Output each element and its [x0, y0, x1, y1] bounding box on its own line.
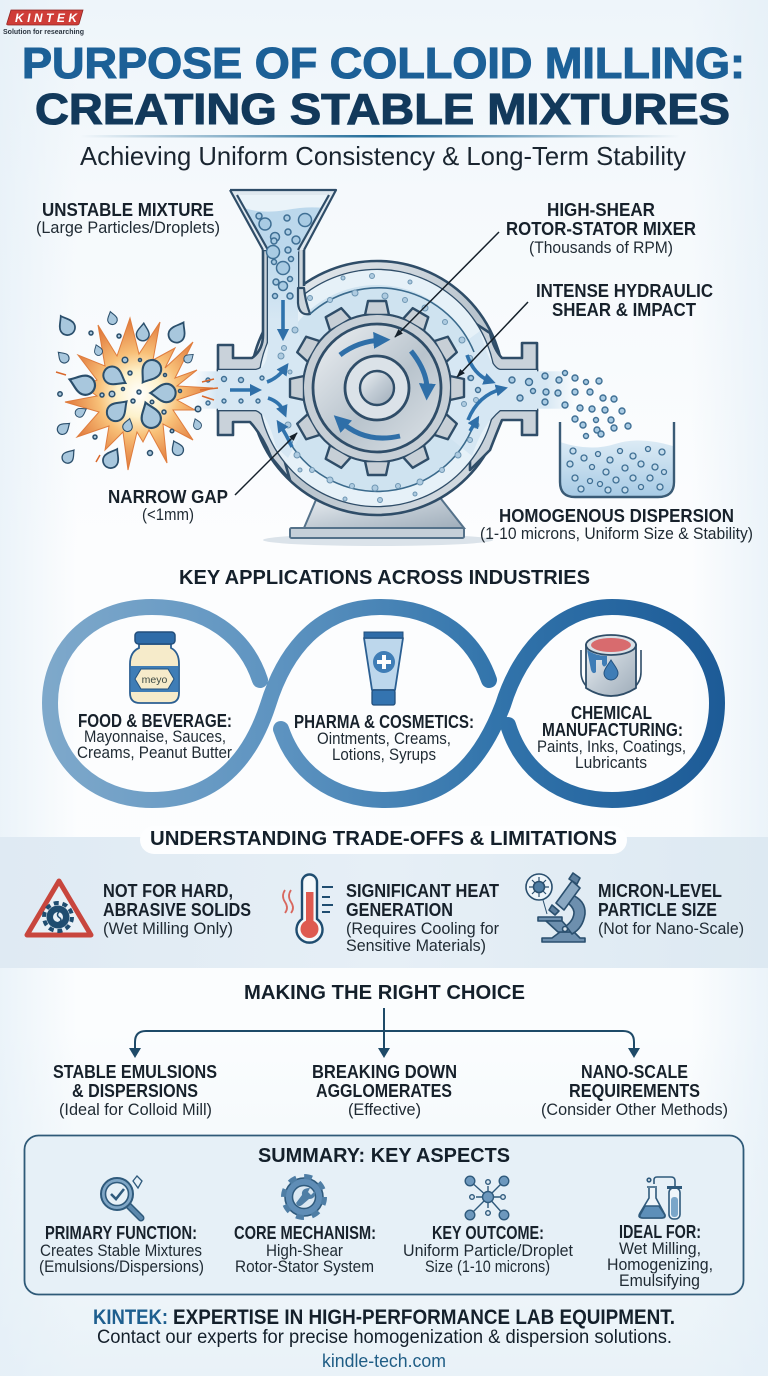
decision tree arrows — [129, 1008, 640, 1058]
icon: ointment tube — [364, 632, 403, 705]
option: nano-scale: REQUIREMENTS — [569, 1081, 700, 1101]
column: primary function: PRIMARY FUNCTION: — [45, 1223, 197, 1243]
panel: chemical manufacturing: Paints, Inks, Coatings, — [537, 737, 686, 756]
footer: company statement: EXPERTISE IN HIGH-PERFORMANCE LAB EQUIPMENT. — [173, 1306, 675, 1329]
stator gear — [290, 301, 464, 475]
item: heat: GENERATION — [346, 900, 453, 920]
hopper funnel — [230, 190, 336, 299]
panel: food and beverage: Mayonnaise, Sauces, — [84, 727, 226, 746]
icon: gear wrench — [284, 1176, 324, 1218]
label: narrow gap: (<1mm) — [142, 505, 194, 524]
icon: thermometer — [283, 875, 333, 943]
icon: microscope — [526, 873, 585, 942]
item: hard solids — [27, 881, 251, 938]
option: stable emulsions — [53, 1062, 217, 1119]
item: heat: (Requires Cooling for — [346, 919, 499, 938]
label: rotor-stator mixer — [506, 200, 696, 257]
panel: food and beverage: Creams, Peanut Butter — [77, 743, 232, 762]
option: nano-scale: (Consider Other Methods) — [541, 1100, 728, 1119]
icon: mayo jar — [130, 632, 179, 703]
title — [22, 40, 745, 134]
icon: flask and test tube — [639, 1177, 682, 1219]
footer: company statement: kindle-tech.com — [322, 1351, 446, 1371]
logo: KINTEK — [3, 10, 84, 36]
option: stable emulsions: STABLE EMULSIONS — [53, 1062, 217, 1082]
icon: magnifier — [101, 1176, 142, 1218]
panel: food and beverage: FOOD & BEVERAGE: — [78, 711, 232, 731]
diagram: colloid mill — [54, 190, 674, 546]
icon: paint can — [581, 635, 641, 696]
label: homogenous dispersion: (1-10 microns, Uniform Size & Stability) — [480, 524, 753, 543]
icon: mayo jar: meyo — [142, 674, 167, 686]
heading: making the right choice: MAKING THE RIGHT CHOICE — [244, 981, 525, 1004]
panel: pharma and cosmetics: PHARMA & COSMETICS: — [294, 712, 474, 732]
column: ideal for — [607, 1177, 713, 1290]
item: hard solids: (Wet Milling Only) — [103, 919, 233, 938]
label: rotor-stator mixer: ROTOR-STATOR MIXER — [506, 219, 696, 239]
icon: warning gear — [27, 881, 91, 935]
column: core mechanism: CORE MECHANISM: — [234, 1223, 376, 1243]
column: primary function: Creates Stable Mixtures — [40, 1241, 202, 1260]
item: hard solids: ABRASIVE SOLIDS — [103, 900, 251, 920]
option: nano-scale: NANO-SCALE — [581, 1062, 688, 1082]
label: unstable mixture: (Large Particles/Droplets) — [36, 218, 220, 237]
label: rotor-stator mixer: (Thousands of RPM) — [529, 238, 673, 257]
panel: trade-offs — [0, 826, 768, 968]
item: particle size — [526, 873, 744, 942]
s-curve ribbon — [50, 607, 717, 800]
column: key outcome: Size (1-10 microns) — [425, 1257, 550, 1276]
beaker: homogenous dispersion — [560, 422, 674, 497]
column: key outcome: Uniform Particle/Droplet — [403, 1241, 573, 1260]
item: particle size: MICRON-LEVEL — [598, 881, 722, 901]
column: ideal for: Emulsifying — [619, 1271, 700, 1290]
column: key outcome — [403, 1176, 573, 1276]
label: rotor-stator mixer: HIGH-SHEAR — [547, 200, 655, 220]
panel: chemical manufacturing: MANUFACTURING: — [542, 720, 683, 740]
option: stable emulsions: (Ideal for Colloid Mill) — [59, 1100, 212, 1119]
panel: pharma and cosmetics: Ointments, Creams, — [317, 729, 451, 748]
icon: particle network — [465, 1176, 509, 1220]
explosion: unstable mixture — [54, 310, 218, 471]
label: homogenous dispersion: HOMOGENOUS DISPERSION — [499, 506, 734, 526]
option: agglomerates — [312, 1062, 457, 1119]
option: agglomerates: BREAKING DOWN — [312, 1062, 457, 1082]
particles in chamber — [278, 274, 479, 502]
item: particle size: PARTICLE SIZE — [598, 900, 717, 920]
label: hydraulic shear — [536, 281, 713, 320]
column: primary function — [39, 1176, 204, 1276]
footer: company statement: Contact our experts for precise homogenization & dispersion solutions. — [97, 1327, 672, 1348]
logo: KINTEK: Solution for researching — [3, 29, 84, 36]
label: unstable mixture — [36, 200, 220, 237]
item: heat — [283, 875, 499, 955]
column: core mechanism: Rotor-Stator System — [235, 1257, 374, 1276]
panel: summary — [24, 1136, 744, 1294]
column: ideal for: Homogenizing, — [607, 1255, 713, 1274]
label: hydraulic shear: SHEAR & IMPACT — [552, 300, 696, 320]
label: hydraulic shear: INTENSE HYDRAULIC — [536, 281, 713, 301]
logo: KINTEK: KINTEK — [15, 11, 78, 25]
panel: chemical manufacturing: CHEMICAL — [571, 703, 652, 723]
footer: company statement: KINTEK: — [93, 1306, 168, 1329]
flow arrows — [230, 300, 502, 447]
base stand — [263, 495, 493, 546]
title: CREATING STABLE MIXTURES — [35, 86, 730, 134]
item: particle size: (Not for Nano-Scale) — [598, 919, 744, 938]
column: key outcome: KEY OUTCOME: — [432, 1223, 544, 1243]
item: heat: Sensitive Materials) — [346, 936, 486, 955]
column: ideal for: IDEAL FOR: — [619, 1222, 701, 1242]
column: ideal for: Wet Milling, — [619, 1239, 701, 1258]
heading: key applications: KEY APPLICATIONS ACROSS INDUSTRIES — [179, 566, 590, 589]
pointer lines — [235, 232, 528, 495]
column: core mechanism — [234, 1176, 376, 1276]
item: heat: SIGNIFICANT HEAT — [346, 881, 499, 901]
label: narrow gap — [108, 487, 228, 524]
chamber outline and liquid — [195, 250, 575, 506]
label: narrow gap: NARROW GAP — [108, 487, 228, 507]
panel: pharma and cosmetics: Lotions, Syrups — [332, 745, 436, 764]
heading: summary: SUMMARY: KEY ASPECTS — [258, 1144, 510, 1167]
panel: pharma and cosmetics — [294, 632, 474, 764]
subtitle: Achieving Uniform Consistency & Long-Term Stability — [80, 141, 686, 171]
panel: food and beverage — [77, 632, 232, 762]
option: agglomerates: (Effective) — [348, 1100, 421, 1119]
heading: trade-offs: UNDERSTANDING TRADE-OFFS & LIMITATIONS — [150, 827, 617, 850]
incoming and outgoing particles — [206, 370, 631, 438]
title: PURPOSE OF COLLOID MILLING: — [22, 40, 745, 88]
rotor disc — [313, 324, 441, 452]
item: hard solids: NOT FOR HARD, — [103, 881, 233, 901]
footer: company statement — [93, 1306, 675, 1371]
panel: chemical manufacturing: Lubricants — [575, 753, 647, 772]
option: nano-scale — [541, 1062, 728, 1119]
label: unstable mixture: UNSTABLE MIXTURE — [42, 200, 214, 220]
housing and flanges — [218, 250, 537, 515]
panel: chemical manufacturing — [537, 635, 686, 772]
option: stable emulsions: & DISPERSIONS — [72, 1081, 198, 1101]
option: agglomerates: AGGLOMERATES — [316, 1081, 452, 1101]
rotation arrows — [340, 340, 427, 438]
label: homogenous dispersion — [480, 506, 753, 543]
column: core mechanism: High-Shear — [266, 1241, 343, 1260]
column: primary function: (Emulsions/Dispersions) — [39, 1257, 204, 1276]
